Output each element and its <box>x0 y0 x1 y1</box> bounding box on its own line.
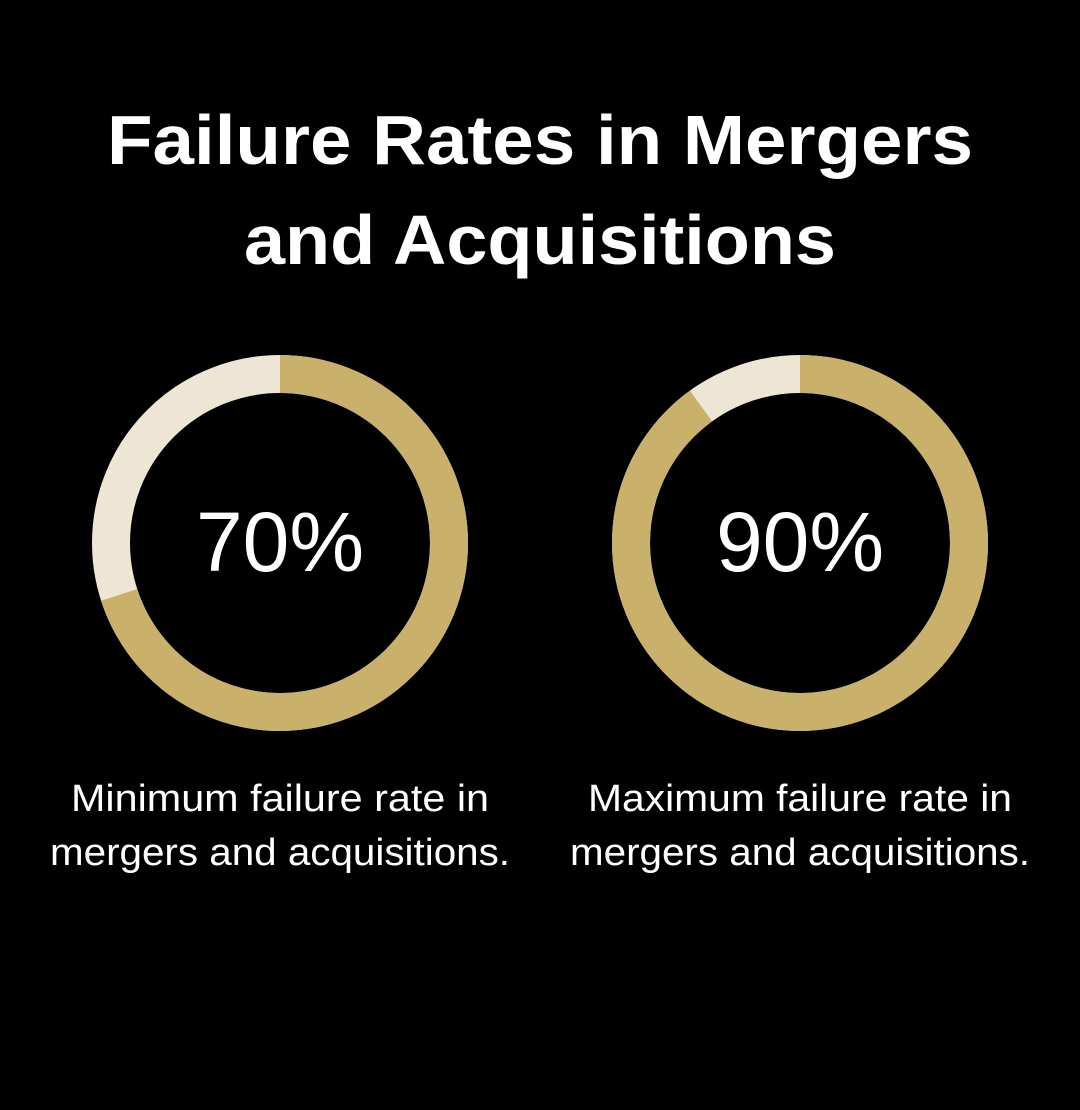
caption: minimum <box>50 778 510 874</box>
donut chart: 90%: 90% <box>716 495 884 589</box>
donut chart: 70%: 70% <box>196 495 364 589</box>
title: Failure Rates in Mergers <box>107 101 973 179</box>
donut chart: 90% <box>631 374 969 712</box>
caption: minimum: Minimum failure rate in <box>71 778 489 820</box>
title: and Acquisitions <box>244 201 836 279</box>
donut chart: 70% <box>111 374 449 712</box>
caption: maximum: mergers and acquisitions. <box>570 832 1030 874</box>
caption: minimum: mergers and acquisitions. <box>50 832 510 874</box>
title <box>107 101 973 279</box>
caption: maximum <box>570 778 1030 874</box>
caption: maximum: Maximum failure rate in <box>588 778 1012 820</box>
